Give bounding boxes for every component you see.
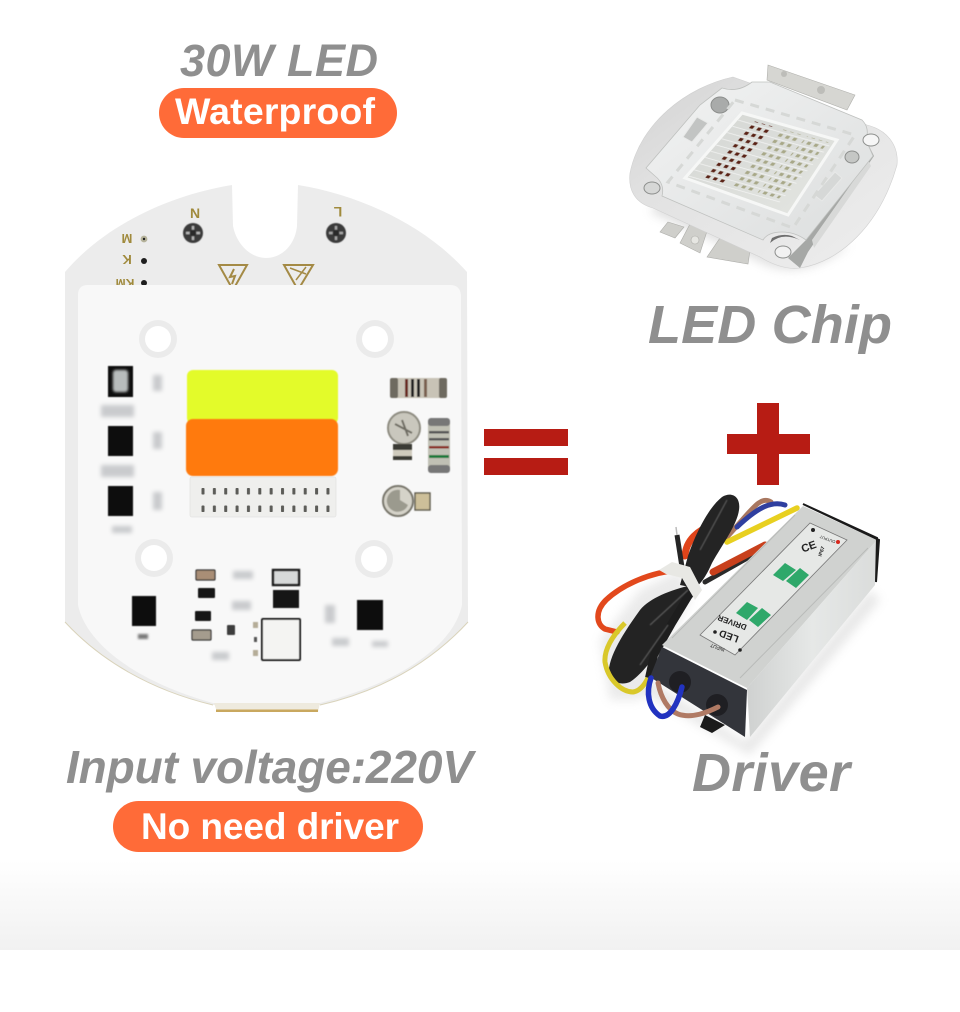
terminal labels: KM: [116, 276, 134, 290]
terminal labels: K: [122, 252, 132, 267]
mounting holes: [135, 320, 394, 578]
label: Driver: Driver: [692, 743, 853, 803]
title: 30W LED: 30W LED: [180, 35, 378, 86]
housing top face: [662, 506, 877, 688]
black IC components left: [108, 366, 133, 516]
LED emitter: yellow-green strip: [187, 370, 338, 424]
terminal labels: [116, 204, 342, 290]
cable highlights: [640, 500, 727, 665]
label text: CE: [800, 539, 818, 555]
bottom grey gradient band: [0, 860, 960, 950]
corner holes: [644, 97, 879, 258]
mounting tab: [700, 715, 725, 733]
toothed frame around window: [668, 100, 855, 228]
label green patches: [736, 563, 809, 627]
LED die array: [190, 477, 336, 517]
vertical resistor: [428, 418, 450, 473]
side slots: [683, 117, 842, 201]
gold rim along lower edge: [65, 622, 468, 705]
LED driver photo: [598, 495, 880, 755]
label: LED Chip: LED Chip: [648, 295, 892, 355]
gold tab: [214, 703, 320, 712]
label text: [710, 534, 836, 652]
label dots: [713, 528, 840, 652]
housing top: [646, 82, 873, 240]
label plate: [700, 523, 847, 655]
rear cap: [803, 504, 879, 582]
terminal labels: L: [333, 204, 342, 220]
die window: [685, 113, 837, 215]
terminal labels: N: [190, 205, 200, 221]
LED chip photo: [630, 65, 897, 269]
second grommet: [706, 694, 728, 716]
label text: OUTPUT: [818, 534, 836, 545]
white panel: [78, 285, 462, 703]
label text: INPUT: [710, 642, 726, 652]
warning triangles: [219, 265, 313, 290]
housing side wall: [788, 140, 874, 268]
base disc: [630, 77, 897, 268]
black cable: lower loop: [609, 585, 697, 683]
capacitor 2: [383, 486, 430, 516]
cable shadow: [600, 570, 690, 700]
terminal labels: M: [122, 231, 132, 246]
front grommets: [669, 671, 691, 693]
housing side face: [747, 540, 877, 737]
lower SMD components: [132, 570, 383, 660]
badge: Waterproof: Waterproof: [175, 90, 376, 132]
thin dark wire with tip: [676, 527, 682, 567]
label text: DRIVER: [716, 613, 748, 632]
blurred markings: [101, 375, 388, 660]
white cable tie: [659, 562, 702, 600]
top terminals: [767, 65, 855, 110]
board back plate: [65, 185, 468, 705]
shadow: [650, 200, 850, 269]
text: input voltage: Input voltage:220V: [66, 741, 476, 793]
screw terminals: [183, 223, 346, 243]
label text: IP67: [817, 546, 827, 558]
badge: No need driver: No need driver: [141, 806, 399, 847]
black cable: run to cap: [649, 590, 692, 678]
input wires: [648, 678, 718, 716]
side wall highlight: [812, 160, 871, 248]
bottom terminals: [660, 222, 750, 264]
LED board with integrated driver: [65, 185, 468, 712]
solder dots: [141, 236, 147, 286]
LED emitter: orange strip: [186, 419, 338, 476]
black cable: upper loop: [680, 495, 739, 588]
rear wires: [685, 500, 797, 582]
soft shadow: [640, 590, 880, 755]
badge: No need driver: [113, 801, 423, 852]
yellow-green wire: [605, 623, 648, 692]
LED die rows: [688, 115, 834, 203]
horizontal resistor: [390, 378, 447, 398]
plus sign: [727, 403, 810, 485]
label text: LED: [718, 627, 740, 644]
orange wire loop: [598, 570, 680, 632]
equals sign: [484, 429, 568, 475]
recessed corner at lower hole: [770, 235, 800, 243]
capacitor 1: [388, 412, 420, 460]
housing end cap: [650, 647, 747, 737]
